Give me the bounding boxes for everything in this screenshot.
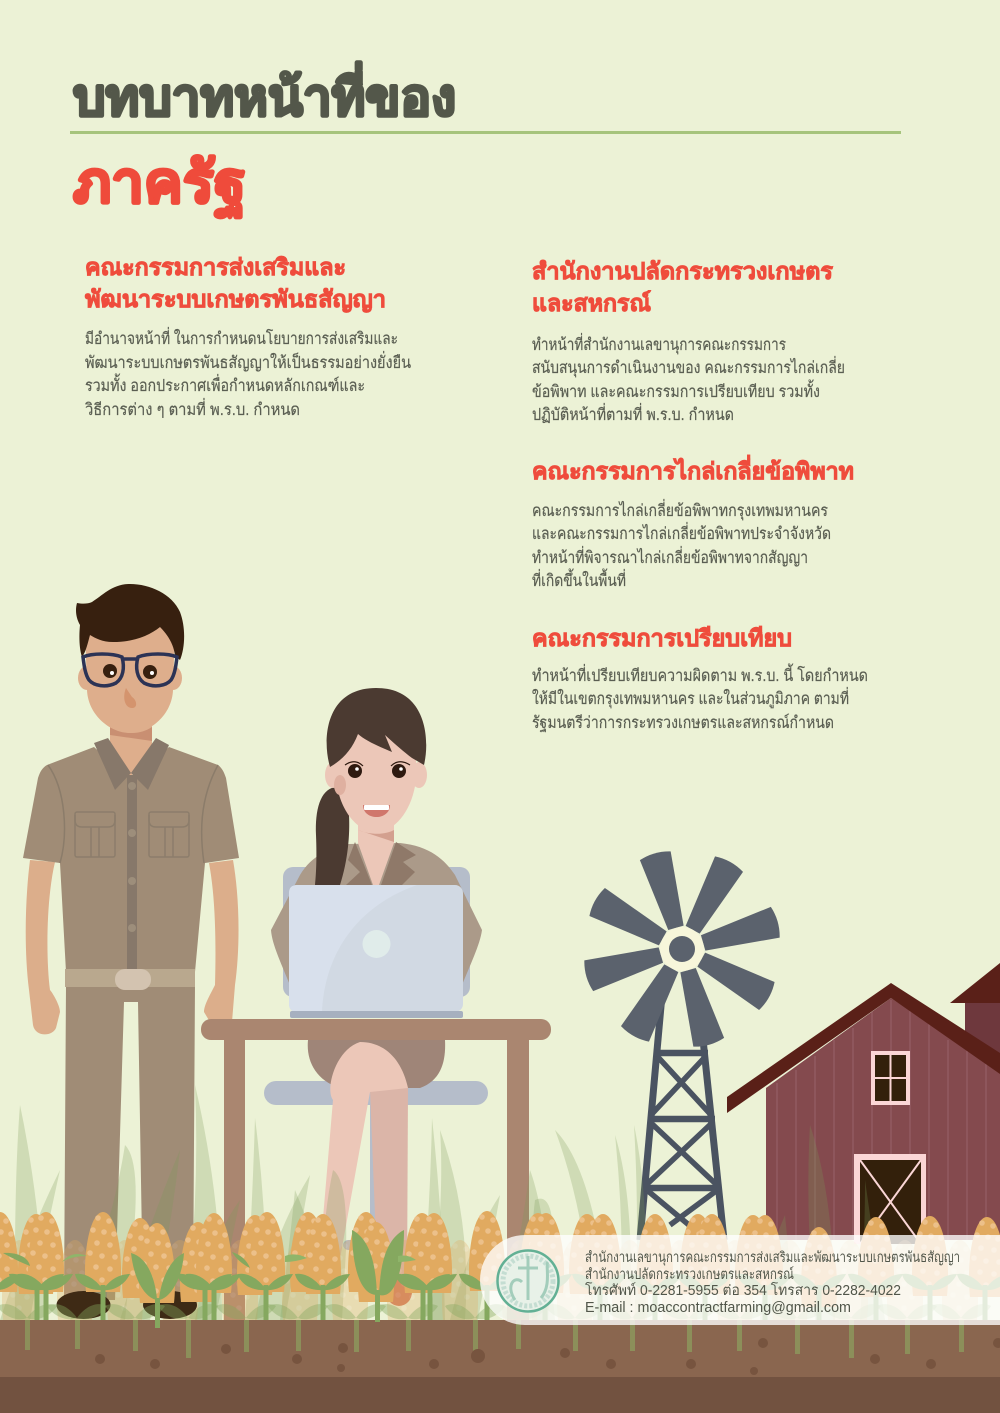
chair post xyxy=(343,1100,418,1250)
soil xyxy=(0,1320,1000,1377)
woman blush xyxy=(334,775,346,795)
corn back row xyxy=(2,1240,978,1320)
body text: mediation xyxy=(532,499,831,590)
soil stones xyxy=(95,1338,1000,1375)
footer pill xyxy=(480,1235,1000,1325)
barn wall xyxy=(766,998,1000,1240)
footer text: สำนักงานปลัดกระทรวงเกษตรและสหกรณ์ xyxy=(585,1266,794,1283)
man eyes xyxy=(103,664,157,679)
barn cupola xyxy=(950,963,1000,1053)
title: บทบาทหน้าที่ของ: บทบาทหน้าที่ของ xyxy=(73,62,456,126)
man belt xyxy=(65,969,195,990)
body text: committee: รวมทั้ง ออกประกาศเพื่อกำหนดหลักเกณฑ์และ xyxy=(85,373,365,395)
body text: permanent secretary xyxy=(532,333,845,424)
corn front row xyxy=(0,1211,1000,1307)
illustration: man xyxy=(23,584,239,1300)
man collar xyxy=(94,738,169,790)
woman lapels xyxy=(346,842,416,885)
heading: mediation: คณะกรรมการไกล่เกลี่ยข้อพิพาท xyxy=(532,454,854,484)
ghost stems on soil xyxy=(25,1320,964,1358)
table xyxy=(201,1019,551,1320)
panel: contract farming committee xyxy=(84,254,411,419)
woman jacket xyxy=(271,843,482,990)
background grass xyxy=(0,1085,885,1320)
woman back leg xyxy=(370,1088,408,1290)
body text: committee: วิธีการต่าง ๆ ตามที่ พ.ร.บ. กำหนด xyxy=(84,398,300,419)
panel: mediation committee xyxy=(532,454,854,590)
man neck xyxy=(110,725,152,778)
man nose xyxy=(124,688,136,708)
woman ponytail xyxy=(315,787,349,885)
body text: settlement xyxy=(532,663,868,732)
man pockets xyxy=(75,812,189,857)
barn door xyxy=(854,1154,926,1244)
woman skirt xyxy=(308,1040,445,1088)
footer text: โทรศัพท์ 0-2281-5955 ต่อ 354 โทรสาร 0-2282-4022 xyxy=(585,1281,901,1299)
body text: permanent secretary: ทำหน้าที่สำนักงานเลขานุการคณะกรรมการ xyxy=(532,333,786,355)
heading: settlement: คณะกรรมการเปรียบเทียบ xyxy=(532,625,792,651)
man hair xyxy=(76,584,184,660)
man arms xyxy=(26,860,239,1034)
chair back xyxy=(283,867,470,997)
woman hair xyxy=(327,688,426,767)
man head xyxy=(76,584,184,733)
title: ภาครัฐ: ภาครัฐ xyxy=(73,151,246,220)
heading: committee: คณะกรรมการส่งเสริมและ xyxy=(85,254,346,280)
man shoes xyxy=(56,1291,197,1319)
title rule xyxy=(70,131,901,134)
woman mouth xyxy=(363,805,390,817)
woman front leg xyxy=(322,1042,408,1270)
heading: committee: พัฒนาระบบเกษตรพันธสัญญา xyxy=(85,286,386,313)
windmill blades xyxy=(582,849,782,1049)
corn sprouts front xyxy=(0,1274,1000,1320)
body text: permanent secretary: ปฏิบัติหน้าที่ตามที่ พ.ร.บ. กำหนด xyxy=(532,403,734,424)
body text: settlement: รัฐมนตรีว่าการกระทรวงเกษตรและสหกรณ์กำหนด xyxy=(532,713,834,732)
man shirt xyxy=(23,747,239,972)
barn roof xyxy=(727,983,1000,1113)
laptop xyxy=(289,885,463,1018)
illustration: windmill xyxy=(582,849,782,1240)
illustration: barn xyxy=(727,963,1000,1244)
corn sprouts lower row xyxy=(0,1304,991,1319)
woman foot xyxy=(386,1278,412,1306)
windmill hub xyxy=(660,927,704,971)
woman head xyxy=(325,688,427,832)
heading: committee xyxy=(85,254,386,313)
heading: permanent secretary: และสหกรณ์ xyxy=(532,290,651,316)
man placket xyxy=(127,775,137,970)
chair seat xyxy=(264,1081,488,1105)
man sleeve seams xyxy=(48,765,218,863)
body text: permanent secretary: สนับสนุนการดำเนินงานของ คณะกรรมการไกล่เกลี่ย xyxy=(532,356,845,378)
big leaves xyxy=(3,1230,416,1328)
panel: office of the permanent secretary xyxy=(532,258,845,424)
footer text: E-mail : moaccontractfarming@gmail.com xyxy=(585,1300,851,1316)
footer contact panel xyxy=(480,1235,1000,1325)
body text: committee: มีอำนาจหน้าที่ ในการกำหนดนโยบายการส่งเสริมและ xyxy=(85,327,398,348)
body text: mediation: และคณะกรรมการไกล่เกลี่ยข้อพิพาทประจำจังหวัด xyxy=(532,522,831,543)
man trousers xyxy=(64,985,195,1300)
footer text xyxy=(585,1250,960,1316)
footer seal xyxy=(496,1249,560,1313)
body text: settlement: ให้มีในเขตกรุงเทพมหานคร และในส่วนภูมิภาค ตามที่ xyxy=(532,687,849,709)
body text: settlement: ทำหน้าที่เปรียบเทียบความผิดตาม พ.ร.บ. นี้ โดยกำหนด xyxy=(532,663,868,685)
heading: permanent secretary xyxy=(532,258,834,316)
body text: committee: พัฒนาระบบเกษตรพันธสัญญาให้เป็นธรรมอย่างยั่งยืน xyxy=(85,351,411,372)
subsoil xyxy=(0,1377,1000,1413)
body text: mediation: ทำหน้าที่พิจารณาไกล่เกลี่ยข้อพิพาทจากสัญญา xyxy=(532,546,808,567)
body text: committee xyxy=(84,327,411,419)
woman eyes xyxy=(345,762,410,778)
body text: mediation: ที่เกิดขึ้นในพื้นที่ xyxy=(532,568,626,590)
panel: settlement committee xyxy=(532,625,868,732)
barn window xyxy=(871,1051,910,1105)
man glasses xyxy=(83,654,177,686)
heading: permanent secretary: สำนักงานปลัดกระทรวงเกษตร xyxy=(532,258,834,284)
illustration: woman at desk xyxy=(201,688,551,1320)
windmill tower xyxy=(640,995,724,1240)
body text: mediation: คณะกรรมการไกล่เกลี่ยข้อพิพาทกรุงเทพมหานคร xyxy=(532,499,828,521)
woman neck xyxy=(358,825,394,885)
body text: permanent secretary: ข้อพิพาท และคณะกรรมการเปรียบเทียบ รวมทั้ง xyxy=(532,379,820,401)
